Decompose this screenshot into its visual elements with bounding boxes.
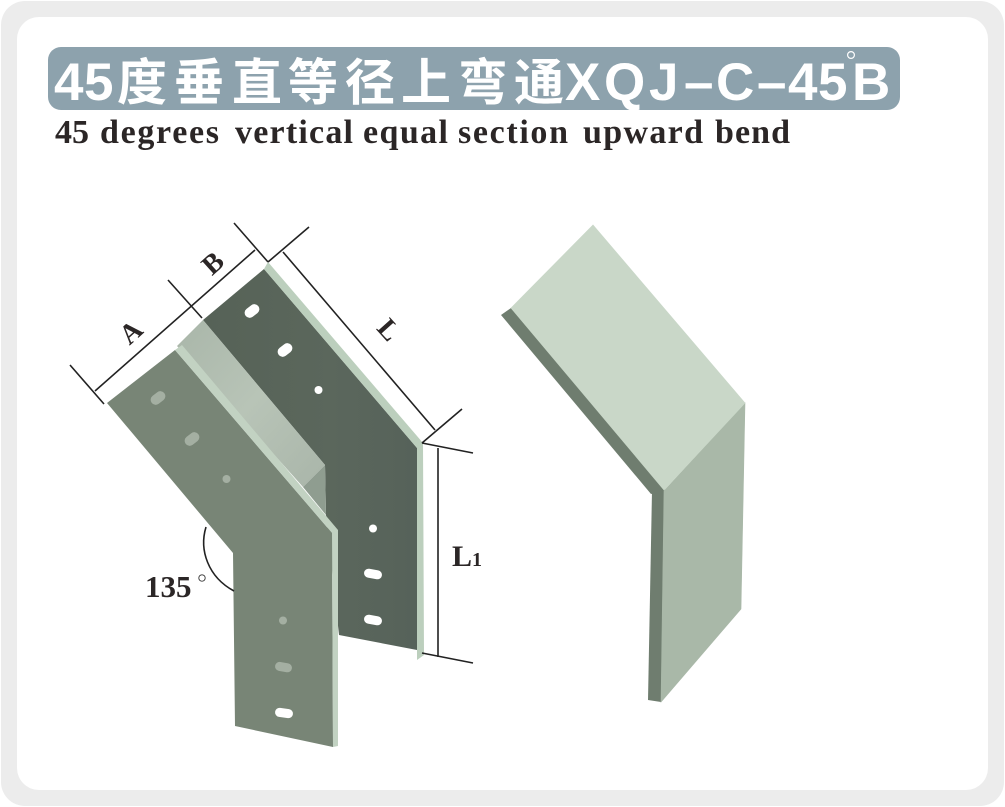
title text: XQJ–C–45B — [565, 53, 890, 112]
front plate open slot — [274, 707, 294, 719]
subtitle: degrees — [100, 114, 219, 151]
cover left edge — [501, 308, 666, 494]
cover top surface — [511, 225, 745, 490]
front plate holes — [149, 389, 293, 673]
subtitle — [55, 114, 790, 151]
label B: B — [196, 246, 231, 281]
subtitle: 45 — [55, 114, 89, 151]
inner wall — [177, 320, 325, 487]
cover front panel — [661, 403, 745, 702]
label 135 degrees: 135 — [145, 569, 192, 604]
subtitle: upward — [583, 114, 703, 151]
title degree mark — [848, 52, 854, 58]
diagram: open tray with dimensions — [70, 223, 482, 747]
back plate flange — [264, 262, 424, 660]
subtitle: vertical — [235, 114, 353, 151]
label A: A — [113, 314, 150, 351]
back plate holes — [243, 302, 383, 626]
title text: 45 — [54, 53, 113, 112]
diagram: closed cover — [501, 225, 745, 702]
subtitle: section — [458, 114, 568, 151]
label L1: 1 — [472, 549, 482, 571]
front plate — [107, 350, 333, 747]
dimension lines — [70, 223, 473, 663]
label L1: L — [452, 540, 472, 573]
label L: L — [371, 313, 406, 348]
subtitle: bend — [715, 114, 790, 151]
title banner — [48, 47, 900, 112]
inner wall end — [303, 465, 326, 515]
cover lower edge — [648, 491, 666, 702]
back plate — [203, 269, 417, 650]
front plate flange — [175, 345, 338, 747]
title text: 度垂直等径上弯通 — [117, 55, 564, 111]
subtitle: equal — [363, 114, 448, 151]
degree mark — [199, 575, 205, 581]
